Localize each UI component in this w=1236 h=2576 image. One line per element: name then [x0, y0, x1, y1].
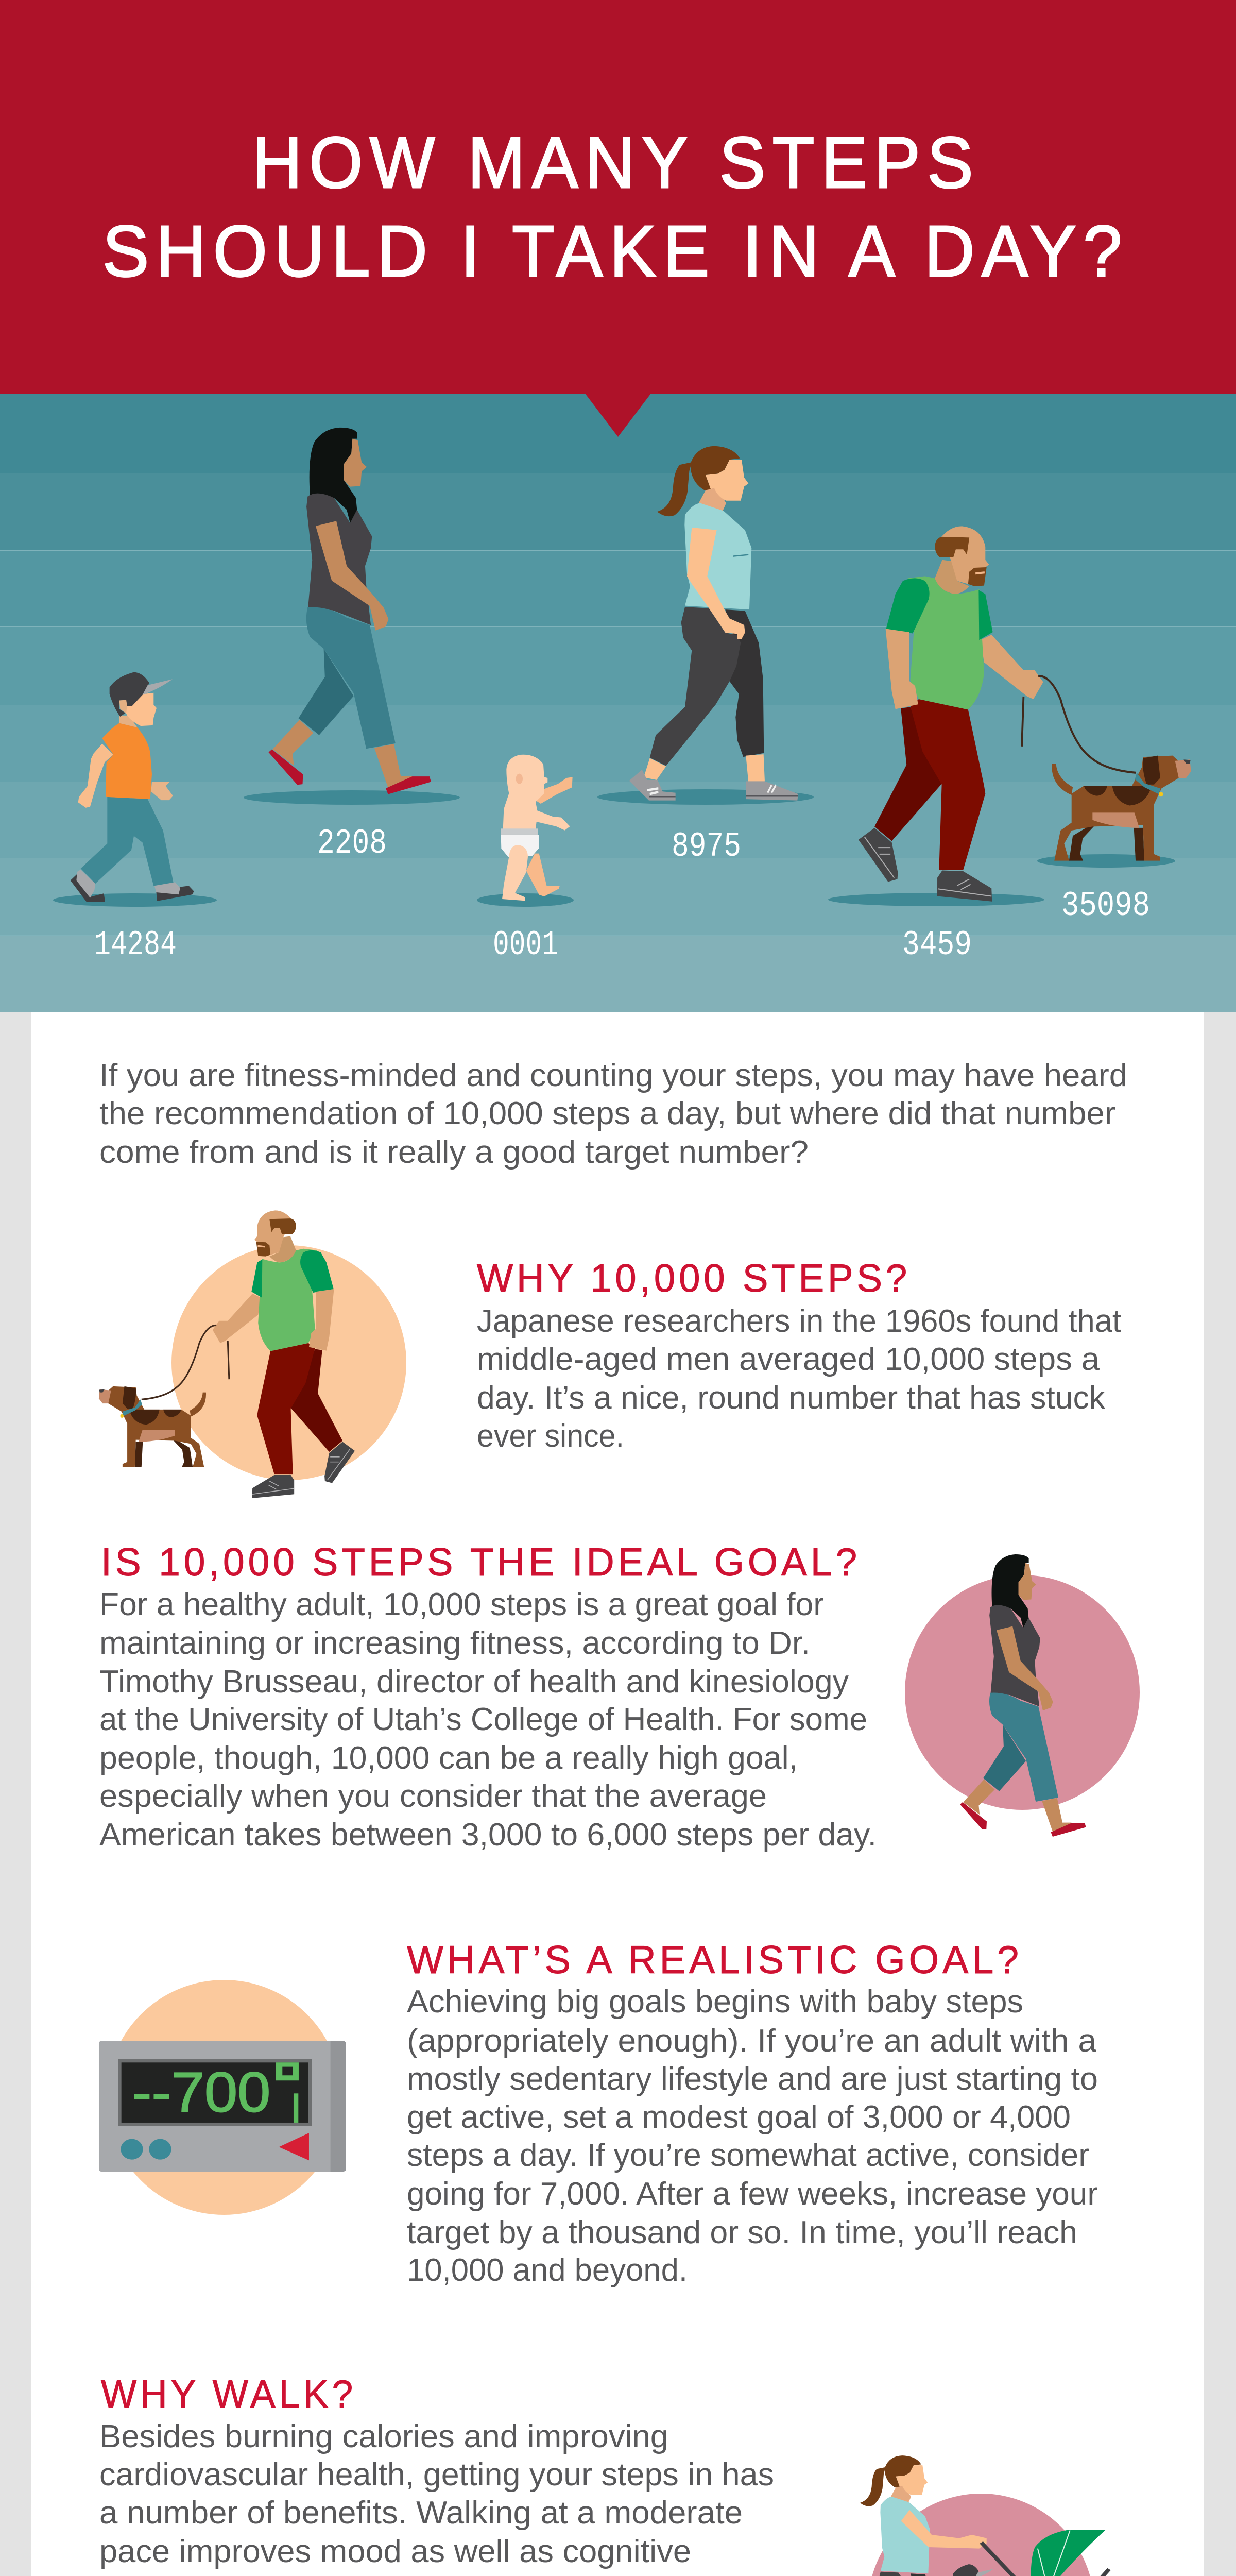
icon: pedometer on peach circle: --700	[132, 2060, 270, 2124]
body: why 10,000 steps: ever since.	[477, 1418, 624, 1454]
title: SHOULD I TAKE IN A DAY?	[102, 210, 1129, 292]
title banner	[0, 0, 1236, 437]
body: realistic goal: steps a day. If you’re somewhat active, consider	[407, 2138, 1089, 2173]
icon: mother pushing stroller with child on pink circle	[839, 2455, 1141, 2576]
step count: dog: 35098	[1061, 886, 1150, 926]
heading: realistic goal: WHAT’S A REALISTIC GOAL?	[407, 1938, 1022, 1982]
body: why walk: pace improves mood as well as cognitive	[99, 2534, 691, 2569]
body: ideal goal: American takes between 3,000 to 6,000 steps per day.	[99, 1817, 877, 1853]
heading: why walk: WHY WALK?	[101, 2372, 356, 2416]
body: ideal goal: maintaining or increasing fitness, according to Dr.	[99, 1625, 810, 1661]
body: realistic goal: 10,000 and beyond.	[407, 2252, 688, 2288]
intro text	[99, 1058, 1127, 1170]
body: realistic goal: target by a thousand or so. In time, you’ll reach	[407, 2215, 1077, 2250]
shadow and figure: baby in diaper	[477, 755, 574, 907]
body: why walk: a number of benefits. Walking at a moderate	[99, 2495, 743, 2531]
intro text: the recommendation of 10,000 steps a day, but where did that number	[99, 1096, 1115, 1131]
icon: woman on pink circle	[905, 1554, 1140, 1837]
body: realistic goal	[407, 1984, 1098, 2288]
panel: is 10,000 steps the ideal goal	[99, 1540, 1140, 1853]
step count: boy: 14284	[94, 925, 177, 965]
body: ideal goal: people, though, 10,000 can be a really high goal,	[99, 1740, 798, 1776]
step count: woman: 2208	[317, 824, 387, 863]
body: why 10,000 steps	[477, 1303, 1121, 1454]
shadow and figure: woman with dark hair	[244, 428, 460, 805]
icon: pedometer on peach circle	[99, 1980, 346, 2215]
intro text: come from and is it really a good target number?	[99, 1134, 809, 1170]
body: ideal goal: Timothy Brusseau, director of health and kinesiology	[99, 1664, 849, 1700]
body: why walk: Besides burning calories and improving	[99, 2419, 668, 2454]
panel: why walk	[99, 2372, 1141, 2576]
body: ideal goal: especially when you consider that the average	[99, 1778, 767, 1814]
white content panel	[31, 1012, 1204, 2576]
heading: why 10,000 steps: WHY 10,000 STEPS?	[477, 1257, 911, 1300]
step count: man: 3459	[902, 925, 972, 965]
body: ideal goal	[99, 1587, 877, 1853]
title: HOW MANY STEPS	[252, 122, 980, 203]
panel: why 10,000 steps	[99, 1210, 1121, 1498]
body: ideal goal: For a healthy adult, 10,000 steps is a great goal for	[99, 1587, 824, 1622]
title	[102, 122, 1129, 292]
hero scene: walkers on teal bands	[0, 394, 1236, 1012]
intro text: If you are fitness-minded and counting your steps, you may have heard	[99, 1058, 1127, 1093]
body: why 10,000 steps: day. It’s a nice, round number that has stuck	[477, 1380, 1106, 1416]
body: why walk	[99, 2419, 774, 2576]
shadow and figure: woman with ponytail	[597, 446, 814, 805]
body: why 10,000 steps: middle-aged men averaged 10,000 steps a	[477, 1342, 1100, 1377]
step count: ponytail woman: 8975	[672, 827, 741, 867]
body: realistic goal: going for 7,000. After a few weeks, increase your	[407, 2176, 1098, 2212]
body: ideal goal: at the University of Utah’s College of Health. For some	[99, 1702, 867, 1737]
shadow and figure: man walking dog	[828, 526, 1191, 906]
body: realistic goal: mostly sedentary lifestyle and are just starting to	[407, 2061, 1098, 2097]
body: realistic goal: (appropriately enough). If you’re an adult with a	[407, 2023, 1097, 2059]
body: realistic goal: Achieving big goals begins with baby steps	[407, 1984, 1023, 2020]
panel: realistic goal	[99, 1938, 1098, 2288]
heading: ideal goal: IS 10,000 STEPS THE IDEAL GOAL?	[101, 1540, 861, 1584]
body: realistic goal: get active, set a modest goal of 3,000 or 4,000	[407, 2099, 1071, 2135]
step count: baby: 0001	[493, 925, 558, 965]
icon: man walking dog on peach circle	[99, 1210, 406, 1498]
shadow and figure: boy in cap	[53, 672, 217, 907]
body: why walk: cardiovascular health, getting your steps in has	[99, 2457, 774, 2493]
body: why 10,000 steps: Japanese researchers in the 1960s found that	[477, 1303, 1121, 1339]
